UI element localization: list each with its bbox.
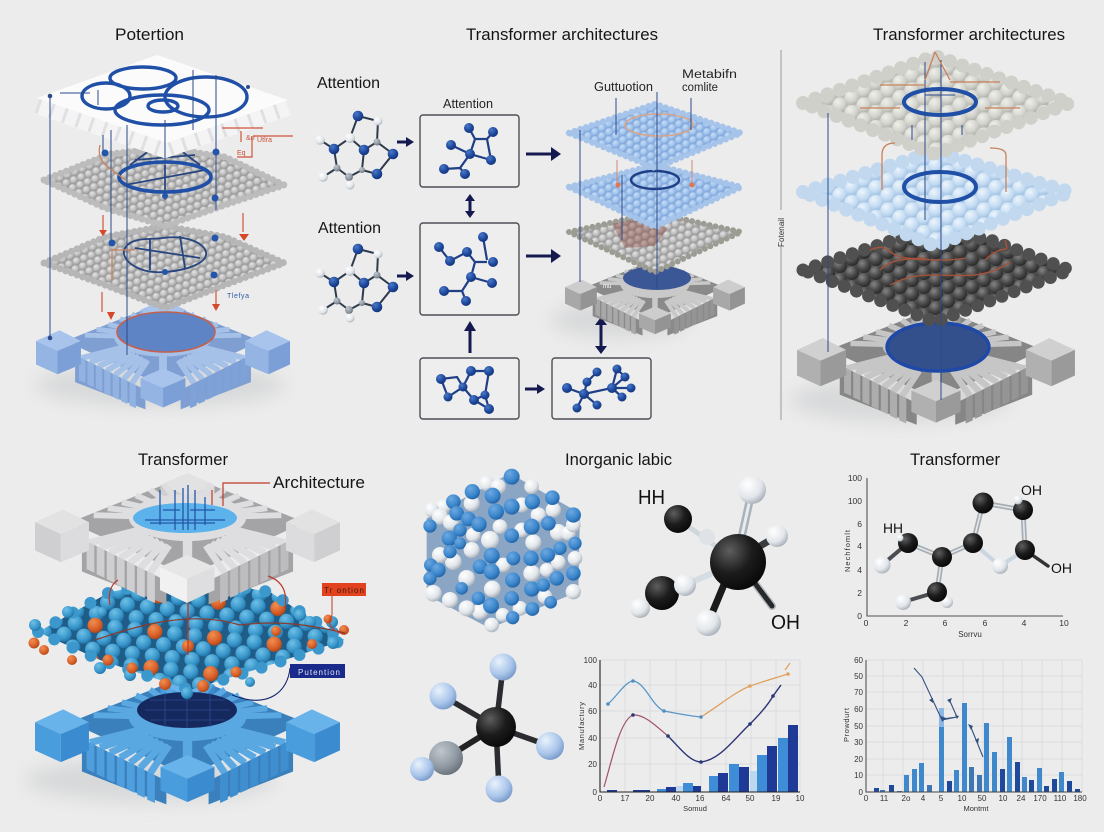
x tick labels: 6 — [983, 618, 988, 628]
x tick labels: 11 — [880, 794, 889, 803]
y tick labels: 0 — [593, 788, 598, 797]
small blue label: Tlefya — [227, 293, 249, 300]
connectors — [580, 92, 691, 288]
x tick labels: 20 — [646, 794, 655, 803]
small red labels — [237, 135, 272, 157]
box label: Attention: Attention — [443, 97, 493, 111]
histogram bars — [874, 703, 1080, 792]
brown traces — [870, 240, 1010, 285]
y tick labels: 100 — [584, 656, 598, 665]
arrows — [397, 137, 607, 394]
y axis title: Manufactury — [577, 702, 586, 750]
small blue disc — [623, 266, 691, 290]
blue disc on top sink — [133, 503, 237, 533]
label OH top: OH — [1021, 482, 1042, 498]
x tick labels: 110 — [1054, 794, 1067, 803]
x tick labels: 50 — [746, 794, 755, 803]
dark particle layer — [803, 238, 1070, 322]
x tick labels: 10 — [958, 794, 967, 803]
vertical connectors — [48, 70, 250, 355]
x tick labels: 2o — [902, 794, 911, 803]
y tick labels — [854, 656, 864, 797]
molecule top — [315, 111, 398, 190]
title: Transformer — [138, 450, 228, 469]
line series blue — [608, 681, 701, 717]
panel: transformer architectures right — [797, 25, 1075, 425]
x tick labels: 0 — [864, 794, 869, 803]
x tick labels: 180 — [1073, 794, 1087, 803]
x tick labels: 4 — [921, 794, 926, 803]
panel: transformer architecture lower left — [28, 450, 366, 804]
y tick labels — [584, 656, 598, 797]
blue ring middle — [904, 172, 976, 202]
particle cloud — [38, 578, 344, 690]
x tick labels: 0 — [864, 618, 869, 628]
navy label — [290, 664, 345, 678]
box 2 with graph — [420, 223, 519, 315]
y tick labels: 10 — [854, 771, 864, 780]
label Architecture: Architecture — [273, 473, 365, 492]
x tick labels — [864, 618, 1069, 628]
title: Potertion: Potertion — [115, 25, 184, 44]
axes — [866, 660, 1082, 792]
panel: transformer molecule chart — [843, 450, 1072, 639]
sphere cube cluster — [423, 469, 582, 632]
orange nodes — [616, 160, 694, 188]
title: Transformer architectures: Transformer architectures — [466, 25, 658, 44]
x axis title: Somud — [683, 804, 707, 813]
blue nodes — [102, 148, 220, 278]
connectors — [828, 60, 962, 400]
x tick labels: 4 — [1022, 618, 1027, 628]
chart: histogram with arrows — [842, 656, 1087, 813]
title: Transformer architectures — [873, 25, 1065, 44]
red callout lines and arrows — [99, 128, 293, 312]
box 1 with graph — [420, 115, 519, 187]
molecule — [874, 492, 1048, 610]
label Metabifn comlite: comlite — [682, 82, 718, 94]
x tick labels: 19 — [772, 794, 781, 803]
grid — [866, 660, 1082, 792]
label Guttuotion: Guttuotion — [594, 80, 653, 94]
label Metabifn comlite — [682, 69, 737, 94]
red label leader — [330, 596, 345, 634]
red arcs — [109, 576, 286, 655]
circuit stems on disc — [145, 485, 225, 530]
x tick labels: 64 — [722, 794, 731, 803]
small red labels: Eq — [237, 150, 246, 157]
panel: potertion stack — [36, 25, 293, 409]
blue five-arm molecule — [410, 654, 564, 802]
axes — [600, 660, 800, 792]
y tick labels — [848, 473, 862, 621]
markers — [606, 672, 790, 764]
small heat sink — [565, 258, 745, 336]
x tick labels: 40 — [672, 794, 681, 803]
white comb top plate — [37, 55, 288, 150]
x tick labels: 17 — [621, 794, 630, 803]
orange traces — [860, 52, 1020, 192]
bars — [607, 725, 798, 792]
blue disc — [887, 323, 989, 371]
y axis title: Nechfomlt — [843, 529, 852, 572]
light blue layer 2 — [569, 165, 741, 227]
y tick labels: 0 — [857, 611, 862, 621]
x tick labels: 10 — [1059, 618, 1069, 628]
peach ring — [625, 114, 693, 136]
particle layer 2 — [44, 226, 284, 308]
squiggle circuit on layer 2 — [124, 236, 206, 272]
title: Inorganic labic — [565, 451, 672, 469]
label OH: OH — [771, 612, 800, 634]
red traces in cloud — [95, 600, 345, 640]
y tick labels: 70 — [854, 688, 864, 697]
particle layer 1 — [44, 148, 284, 226]
blue loops on top plate — [82, 67, 247, 125]
red line to Architecture — [212, 483, 270, 506]
axes — [867, 478, 1063, 616]
y tick labels: 60 — [854, 656, 864, 665]
box 4 with graph — [552, 358, 651, 419]
y tick labels: 0 — [859, 788, 864, 797]
x tick labels: 10 — [999, 794, 1008, 803]
base disc with red ring — [117, 312, 215, 352]
x tick labels: 5 — [939, 794, 944, 803]
black and white molecule — [630, 476, 788, 636]
x tick labels: 6 — [943, 618, 948, 628]
y tick labels: 60 — [588, 707, 598, 716]
title: Transformer — [910, 450, 1000, 469]
edge particles — [28, 606, 349, 699]
heading: Attention 2: Attention — [318, 220, 381, 237]
x tick labels: 50 — [978, 794, 987, 803]
x axis title: Montmt — [963, 804, 989, 813]
gray particle layer — [569, 213, 741, 272]
divider with rotated label: Fotenail — [777, 218, 786, 247]
y tick labels: 50 — [854, 672, 864, 681]
x tick labels: 10 — [796, 794, 805, 803]
label HH: HH — [638, 487, 665, 509]
box 3 with graph — [420, 358, 519, 419]
red arrowheads — [99, 230, 249, 320]
bottom blue heat sink — [35, 673, 340, 804]
circuit clutter on layer 1 — [125, 150, 205, 190]
top gray heat sink — [35, 473, 340, 604]
label HH: HH — [883, 521, 903, 536]
small red labels: &rr — [246, 135, 256, 142]
heading: Attention 1: Attention — [317, 75, 380, 92]
molecule lower — [315, 244, 398, 322]
pale blue particle layer — [803, 152, 1070, 246]
y tick labels: 20 — [854, 755, 864, 764]
y tick labels: 100 — [848, 473, 862, 483]
blue ring on layer 1 — [119, 162, 211, 192]
red label: Tr ontion — [324, 586, 364, 595]
light blue layer 1 — [569, 104, 741, 168]
x tick labels — [598, 794, 805, 803]
grid — [600, 660, 800, 792]
y tick labels: 30 — [854, 738, 864, 747]
x tick labels — [864, 794, 1087, 803]
ground shadows — [25, 302, 1010, 802]
y tick labels: 60 — [854, 705, 864, 714]
navy disc — [137, 692, 237, 728]
x tick labels: 24 — [1017, 794, 1026, 803]
chart: combined line and bar chart — [577, 656, 805, 813]
y tick labels: 100 — [848, 496, 862, 506]
navy curve leader — [232, 668, 290, 700]
y tick labels: 50 — [854, 722, 864, 731]
y tick labels: 40 — [588, 734, 598, 743]
x tick labels: 16 — [696, 794, 705, 803]
y axis title: Prowdurt — [842, 707, 851, 742]
navy ring — [631, 171, 679, 189]
small stack — [565, 69, 745, 336]
line series red and navy — [604, 685, 781, 787]
x tick labels: 0 — [598, 794, 603, 803]
pale gray particle layer — [803, 56, 1070, 154]
front cube highlight on top sink — [160, 555, 214, 603]
y tick labels: 2 — [857, 588, 862, 598]
blue ring top — [904, 89, 976, 115]
small label mu: mu — [603, 284, 611, 290]
y tick labels: 4 — [857, 541, 862, 551]
red label — [322, 583, 366, 596]
navy label: Putention — [298, 668, 340, 677]
gray heat sink — [797, 305, 1075, 425]
red patch — [612, 218, 668, 248]
panel: attention flow — [315, 25, 745, 419]
base heat sink blue — [36, 300, 290, 409]
arrow overlays — [914, 668, 983, 757]
small red labels: Utlra — [257, 137, 272, 144]
panel: inorganic labic — [410, 451, 800, 802]
line series orange — [701, 663, 790, 717]
x tick labels: 2 — [904, 618, 909, 628]
label OH bottom: OH — [1051, 560, 1072, 576]
y tick labels: 6 — [857, 519, 862, 529]
label Metabifn comlite: Metabifn — [682, 69, 737, 81]
y tick labels: 40 — [588, 681, 598, 690]
x tick labels: 170 — [1033, 794, 1047, 803]
y tick labels: 20 — [588, 760, 598, 769]
y tick labels: 4 — [857, 565, 862, 575]
x axis title: Sorrvu — [958, 630, 982, 639]
